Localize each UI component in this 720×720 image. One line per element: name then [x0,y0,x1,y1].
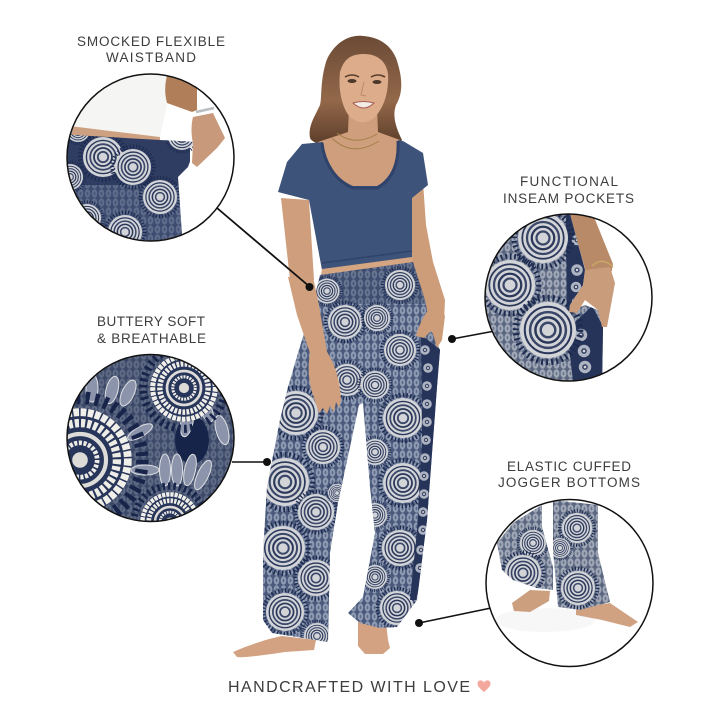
heading: buttery soft and breathable [97,314,206,346]
connector: cuffs [415,608,491,627]
heading: functional inseam pockets [503,174,634,206]
waistband shading [310,262,430,304]
front pant leg [553,500,610,610]
circle: cuff detail [485,498,654,668]
model: left forearm and hand over pants [288,277,341,414]
raised arm [165,76,197,112]
patterned waistband [68,134,193,240]
model: blue crop top [278,140,428,270]
connector: waistband [217,208,314,291]
model: feet [233,622,390,657]
dark background patch [175,416,209,464]
mandalas [514,209,572,267]
circle: waistband detail [66,73,235,242]
heading: functional inseam pockets: INSEAM POCKETS [503,191,634,206]
large mandalas [68,355,226,521]
connector: fabric [232,458,271,466]
model: midriff [320,257,414,280]
footer tagline: HANDCRAFTED WITH LOVE [228,679,470,696]
bracelet [196,108,214,112]
feather leaves [86,374,232,492]
white top [74,75,167,137]
heading: buttery soft and breathable: BUTTERY SOFT [97,314,205,329]
model: hair back [310,36,402,144]
heading: elastic cuffed jogger bottoms [498,459,640,490]
heading: smocked flexible waistband: WAISTBAND [106,50,196,65]
circle: fabric detail [66,354,235,522]
model: neckline trim [322,141,398,188]
dark side band [566,214,603,380]
model: hem band [322,251,412,263]
floor shadow [495,608,595,632]
patterned harem pants [263,262,440,642]
forearm [570,214,613,272]
model: right hand at pocket [416,304,445,348]
heading: elastic cuffed jogger bottoms: ELASTIC CUFFED [507,459,631,474]
model figure [233,36,450,657]
heading: buttery soft and breathable: & BREATHABLE [97,331,206,346]
bracelet [592,261,613,267]
model: upper left arm [281,198,314,280]
model: right arm [410,182,445,350]
model: necklaces [332,133,379,149]
model: face [339,54,388,122]
hand in pocket [569,267,615,327]
icon: heart [478,680,490,692]
heading: smocked flexible waistband [77,34,225,65]
back pant leg [497,505,553,590]
model: neck and chest [318,108,402,190]
heading: smocked flexible waistband: SMOCKED FLEXIBLE [77,34,225,49]
circle: pocket detail [484,213,653,382]
back foot [512,590,550,612]
pocket flowers [572,235,578,246]
midriff skin [72,126,160,140]
connector: pockets [448,332,492,343]
front foot [576,603,638,627]
pants fabric [486,214,603,380]
mandala motifs [257,268,426,651]
side stripe with flowers [410,335,441,600]
heading: elastic cuffed jogger bottoms: JOGGER BOTTOMS [498,475,640,490]
hand pulling waistband [192,113,225,167]
heading: functional inseam pockets: FUNCTIONAL [520,174,618,189]
